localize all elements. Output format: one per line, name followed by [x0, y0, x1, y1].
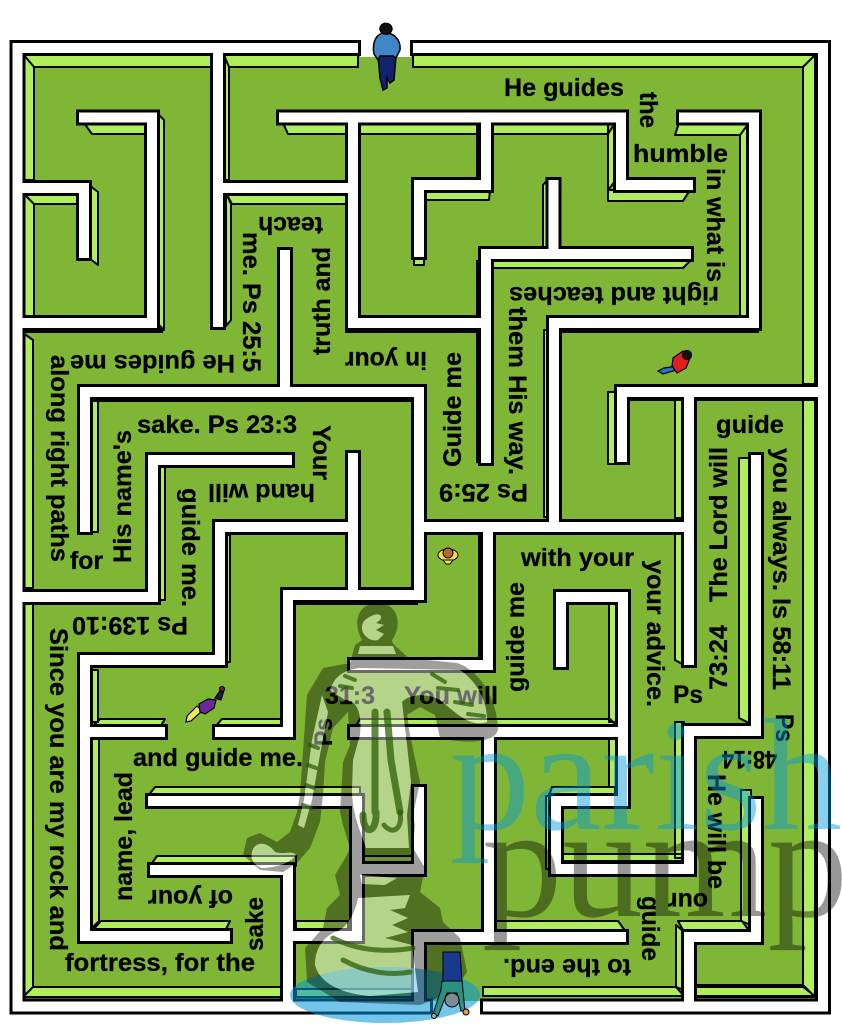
figure: person in red — [658, 350, 692, 374]
verse: Ps 48:14 He will be our guide to the end path: to the end. — [503, 953, 631, 981]
verse: He guides me along right paths, Ps 23:3 path: for — [70, 547, 103, 575]
verse: He guides the humble, Ps 25:9 path: He guides — [504, 74, 624, 102]
logo text: pump: pump — [482, 773, 842, 951]
verse: Guide me in your truth, Ps 25:5 path — [237, 211, 467, 467]
verse: Since you are my rock, Ps 31:3 path: Since you are my rock and — [44, 628, 72, 951]
verse: Since you are my rock, Ps 31:3 path: fortress, for the — [65, 949, 255, 977]
logo watermark: pump illustration — [243, 603, 498, 1005]
verse: Since you are my rock, Ps 31:3 path: name, lead — [110, 772, 138, 901]
verse: You will guide me with your advice, Ps 73:24 path: your advice. — [641, 560, 669, 707]
pump shading strokes — [303, 674, 484, 974]
verse: He guides me along right paths, Ps 23:3 path — [45, 349, 297, 575]
verse: He guides me along right paths, Ps 23:3 path: along right paths — [45, 355, 73, 562]
verse: Since you are my rock, Ps 31:3 path: sake — [241, 897, 269, 951]
verse: You will guide me with your advice, Ps 73:24 path: with your — [520, 544, 634, 572]
verse: Since you are my rock, Ps 31:3 path: and guide me. — [133, 744, 303, 772]
verse: Guide me in your truth, Ps 25:5 path: teach — [258, 211, 323, 239]
verse: The Lord will guide you always, Is 58:11 path: guide — [716, 411, 784, 439]
verse: Your hand will guide me, Ps 139:10 path: Ps 139:10 — [72, 611, 188, 639]
verse: Ps 48:14 He will be our guide to the end path — [503, 714, 798, 981]
verse: Your hand will guide me, Ps 139:10 path — [72, 425, 335, 639]
verse: Ps 48:14 He will be our guide to the end path: 48:14 — [722, 745, 777, 773]
verse: The Lord will guide you always, Is 58:11 path: The Lord will — [705, 447, 733, 602]
verse: Ps 48:14 He will be our guide to the end path: our — [668, 887, 708, 915]
pump light highlights — [252, 614, 487, 996]
verse: Your hand will guide me, Ps 139:10 path: guide me. — [176, 488, 204, 607]
verse: Ps 48:14 He will be our guide to the end path: guide — [636, 896, 664, 961]
verse: He guides the humble, Ps 25:9 path: Ps 25:9 — [439, 478, 528, 506]
verse: He guides the humble, Ps 25:9 path — [439, 74, 729, 506]
verse: The Lord will guide you always, Is 58:11 path — [705, 411, 795, 690]
verse: Ps 48:14 He will be our guide to the end path: He will be — [702, 774, 730, 889]
verse: Since you are my rock, Ps 31:3 path: of your — [148, 884, 233, 912]
figure: person in purple — [186, 686, 224, 722]
verse: Guide me in your truth, Ps 25:5 path: truth and — [308, 247, 336, 355]
logo text: parish: parish — [450, 686, 842, 864]
verse: You will guide me with your advice, Ps 73:24 path — [404, 544, 733, 710]
verse: Your hand will guide me, Ps 139:10 path: hand will — [208, 478, 315, 506]
verse: He guides the humble, Ps 25:9 path: right and teaches — [509, 281, 719, 309]
verse: You will guide me with your advice, Ps 73:24 path: Ps — [673, 681, 703, 709]
verse: He guides the humble, Ps 25:9 path: them His way. — [503, 307, 531, 475]
verse: Since you are my rock, Ps 31:3 path: Ps — [310, 718, 338, 746]
verse: You will guide me with your advice, Ps 73:24 path: guide me — [502, 582, 530, 692]
figure: person in blue at entrance — [373, 23, 400, 90]
verse: Since you are my rock, Ps 31:3 path: 31:3 — [325, 682, 375, 710]
figure: person at exit — [432, 952, 469, 1018]
verse: You will guide me with your advice, Ps 73:24 path: 73:24 — [705, 625, 733, 690]
verse: He guides me along right paths, Ps 23:3 path: His name's — [109, 430, 137, 563]
verse: He guides me along right paths, Ps 23:3 path: He guides me — [70, 349, 235, 377]
verse: He guides the humble, Ps 25:9 path: the — [634, 92, 662, 128]
verse: The Lord will guide you always, Is 58:11 path: you always. Is 58:11 — [767, 448, 795, 690]
wall contact shadows — [23, 123, 823, 662]
figure: person in yellow from above — [438, 548, 458, 564]
logo watermark: water puddle — [290, 967, 480, 1023]
verse: You will guide me with your advice, Ps 73:24 path: You will — [404, 682, 498, 710]
pump dark silhouette — [243, 603, 498, 1005]
verse: Guide me in your truth, Ps 25:5 path: me. Ps 25:5 — [237, 232, 265, 372]
verse: Guide me in your truth, Ps 25:5 path: Guide me — [439, 352, 467, 467]
verse: He guides the humble, Ps 25:9 path: humble — [633, 140, 728, 168]
verse: He guides me along right paths, Ps 23:3 path: sake. Ps 23:3 — [137, 411, 297, 439]
verse: Since you are my rock, Ps 31:3 path — [44, 628, 375, 977]
verse: He guides the humble, Ps 25:9 path: in what is — [701, 168, 729, 282]
verse: Guide me in your truth, Ps 25:5 path: in your — [345, 346, 427, 374]
verse: Your hand will guide me, Ps 139:10 path: Your — [307, 425, 335, 480]
verse: Ps 48:14 He will be our guide to the end path: Ps — [770, 714, 798, 742]
